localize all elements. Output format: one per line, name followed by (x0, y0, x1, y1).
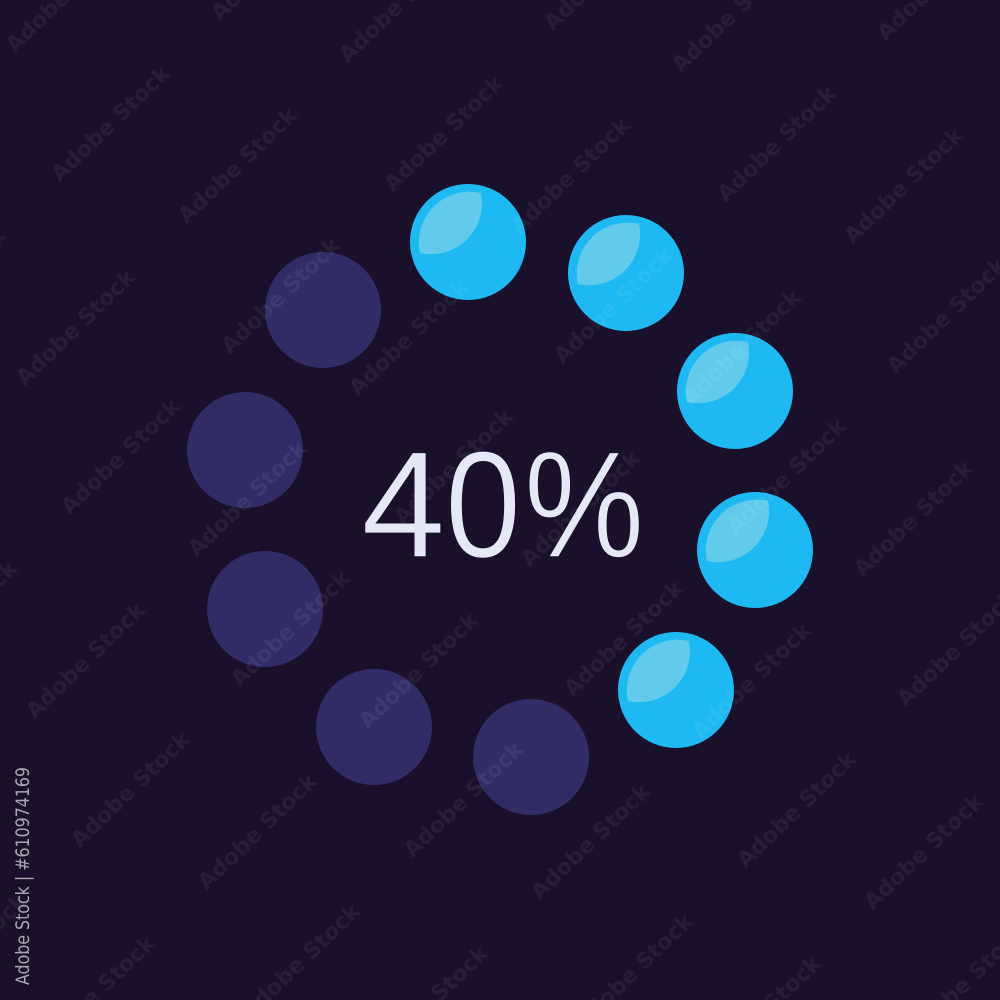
dot 6: inactive purple (473, 699, 589, 815)
watermark pattern: Adobe Stock (21, 597, 152, 724)
watermark pattern: Adobe Stock (849, 455, 980, 582)
dot 4: active blue with highlight (697, 492, 813, 608)
watermark pattern: Adobe Stock (56, 393, 187, 520)
watermark pattern: Adobe Stock (46, 60, 177, 187)
watermark pattern: Adobe Stock (549, 242, 680, 369)
dot 7: inactive purple (316, 669, 432, 785)
dot 9: inactive purple (187, 392, 303, 508)
stock id caption: Adobe Stock | #610974169 (12, 767, 34, 985)
watermark pattern: Adobe Stock (183, 435, 314, 562)
watermark pattern: Adobe Stock (399, 736, 530, 863)
watermark pattern: Adobe Stock (344, 274, 475, 401)
dot 8: inactive purple (207, 551, 323, 667)
watermark pattern: Adobe Stock (732, 746, 863, 873)
watermark pattern: Adobe Stock (173, 102, 304, 229)
dot 2: active blue with highlight (568, 215, 684, 331)
dot 1: active blue with highlight (410, 184, 526, 300)
watermark pattern: Adobe Stock (389, 403, 520, 530)
percentage label: % (524, 421, 644, 590)
loader ring of ten dots (187, 184, 813, 815)
watermark pattern: Adobe Stock (506, 112, 637, 239)
watermark pattern: Adobe Stock (193, 768, 324, 895)
dot 10: inactive purple (265, 252, 381, 368)
watermark pattern: Adobe Stock (526, 778, 657, 905)
dot 3: active blue with highlight (677, 333, 793, 449)
watermark pattern: Adobe Stock (687, 617, 818, 744)
watermark pattern: Adobe Stock (216, 232, 347, 359)
percentage label: 4 (361, 420, 446, 590)
dot 5: active blue with highlight (618, 632, 734, 748)
watermark pattern: Adobe Stock (354, 607, 485, 734)
watermark pattern: Adobe Stock (226, 565, 357, 692)
watermark pattern: Adobe Stock (712, 80, 843, 207)
watermark pattern: Adobe Stock (516, 445, 647, 572)
watermark pattern: Adobe Stock (859, 788, 990, 915)
watermark pattern: Adobe Stock (379, 70, 510, 197)
watermark pattern: Adobe Stock (722, 413, 853, 540)
watermark pattern: Adobe Stock (559, 575, 690, 702)
watermark pattern: Adobe Stock (11, 264, 142, 391)
percentage label (361, 419, 644, 590)
watermark pattern: Adobe Stock (839, 122, 970, 249)
watermark pattern: Adobe Stock (677, 284, 808, 411)
percentage label: 0 (445, 419, 521, 590)
watermark pattern: Adobe Stock (66, 726, 197, 853)
